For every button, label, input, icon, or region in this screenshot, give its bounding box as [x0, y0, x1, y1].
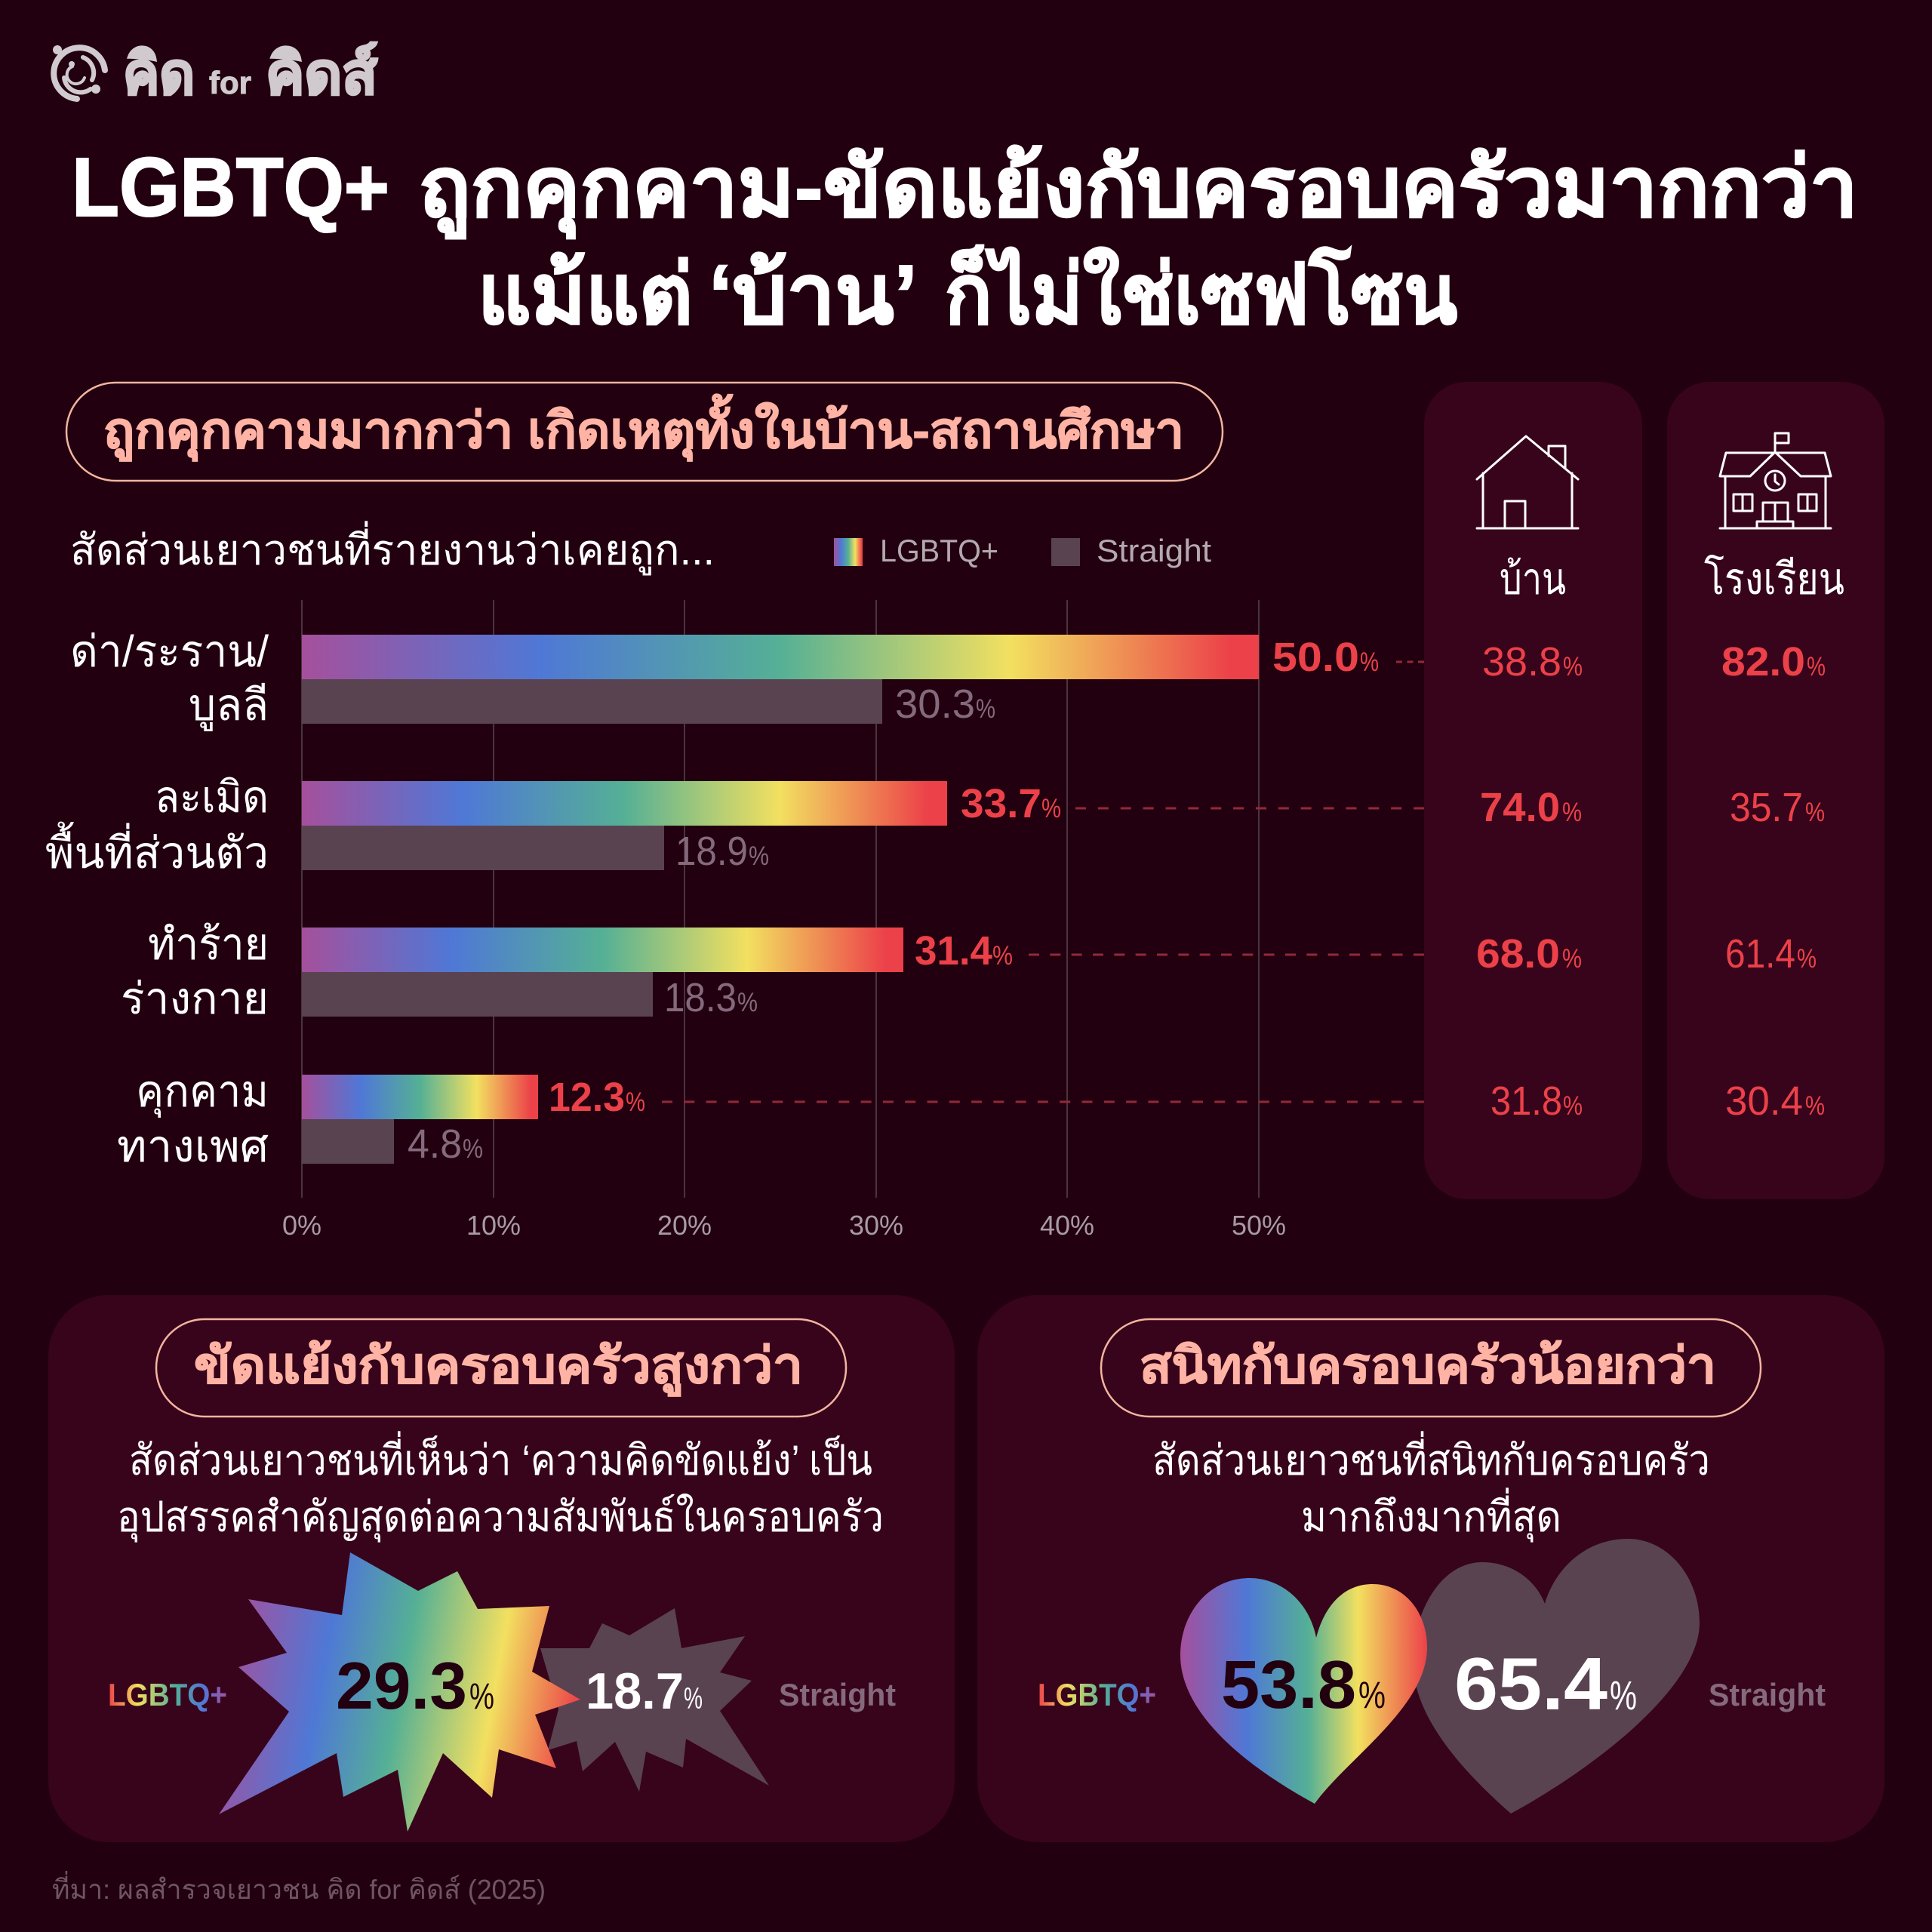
row: privacy: % — [749, 841, 769, 871]
heading pill: conflict: ขัดแย้งกับครอบครัวสูงกว่า — [194, 1337, 803, 1397]
row: bully: 30.3 — [895, 681, 975, 727]
home values: % — [1562, 798, 1582, 827]
row: sexual: % — [463, 1134, 483, 1164]
title: LGBTQ+ — [72, 141, 389, 234]
axis ticks: 30% — [849, 1210, 903, 1241]
chart subtitle: สัดส่วนเยาวชนที่รายงานว่าเคยถูก... — [70, 521, 715, 576]
value: 18.7: 18.7 — [586, 1663, 684, 1720]
row: privacy: ละเมิด — [155, 773, 269, 822]
legend: LGBTQ+ — [880, 533, 998, 568]
school values — [1721, 639, 1826, 1124]
source note: ที่มา: ผลสำรวจเยาวชน คิด for คิดส์ (2025) — [52, 1871, 546, 1905]
value: 53.8: % — [1358, 1674, 1386, 1716]
Straight label: Straight — [779, 1677, 896, 1712]
value: 65.4: 65.4 — [1454, 1642, 1607, 1725]
row: sexual: 4.8 — [408, 1121, 462, 1167]
row: physical: 31.4 — [915, 928, 992, 974]
value: 18.7: % — [684, 1682, 703, 1715]
row: physical: ร่างกาย — [121, 974, 269, 1023]
row: sexual: ทางเพศ — [117, 1122, 269, 1171]
school values: % — [1797, 944, 1817, 974]
school values: % — [1805, 1091, 1825, 1121]
icon: house — [1477, 436, 1578, 528]
Straight label: Straight — [1709, 1677, 1826, 1712]
row: privacy: 18.9 — [675, 829, 748, 874]
axis ticks: 0% — [282, 1210, 321, 1241]
row: bully: ด่า/ระราน/ — [70, 627, 269, 676]
row: sexual: % — [626, 1088, 645, 1117]
heading pill: close — [1101, 1319, 1761, 1417]
icon: school — [1720, 433, 1831, 528]
close description: มากถึงมากที่สุด — [1301, 1487, 1561, 1543]
panel: conflict — [48, 1295, 955, 1842]
logo wordmark — [123, 42, 378, 106]
LGBTQ+ label: LGBTQ+ — [108, 1677, 227, 1712]
home values — [1476, 639, 1583, 1124]
school values: % — [1805, 798, 1825, 827]
burst: straight — [540, 1608, 769, 1792]
row: sexual: 12.3 — [549, 1075, 625, 1120]
heart: LGBTQ+ — [1180, 1578, 1427, 1804]
row: bully: % — [1360, 648, 1379, 677]
heart: straight — [1413, 1539, 1700, 1814]
panel: home column — [1424, 382, 1642, 1199]
title — [72, 141, 1858, 341]
row: bully: บูลลี — [189, 681, 269, 731]
home values: 74.0 — [1480, 785, 1560, 830]
home values: % — [1563, 1091, 1583, 1121]
row: sexual: คุกคาม — [136, 1067, 269, 1118]
axis ticks: 10% — [466, 1210, 521, 1241]
burst: LGBTQ+ — [219, 1552, 580, 1832]
title: ‘บ้าน’ — [709, 248, 918, 341]
logo — [53, 42, 378, 106]
axis ticks: 40% — [1040, 1210, 1094, 1241]
value: 29.3: 29.3 — [336, 1648, 467, 1723]
home values: 68.0 — [1476, 931, 1560, 977]
dashed connectors — [662, 662, 1424, 1102]
close description: สัดส่วนเยาวชนที่สนิทกับครอบครัว — [1152, 1431, 1710, 1484]
row: privacy — [45, 773, 1061, 878]
close description — [1152, 1431, 1710, 1543]
school values: 30.4 — [1725, 1078, 1803, 1124]
row: bully: % — [976, 694, 995, 724]
conflict description — [117, 1431, 884, 1543]
title: ก็ไม่ใช่เซฟโซน — [945, 245, 1457, 341]
row: physical — [121, 920, 1013, 1023]
row: bully — [70, 627, 1379, 731]
logo wordmark: คิดส์ — [266, 42, 378, 106]
school values: 35.7 — [1730, 785, 1803, 830]
axis ticks — [282, 1210, 1286, 1241]
heading pill: threatened: ถูกคุกคามมากกว่า เกิดเหตุทั้งในบ้าน-สถานศึกษา — [103, 393, 1184, 462]
title: ถูกคุกคาม-ขัดแย้งกับครอบครัวมากกว่า — [419, 141, 1858, 239]
home label: บ้าน — [1500, 555, 1566, 604]
row: physical: 18.3 — [664, 975, 737, 1020]
axis ticks: 20% — [657, 1210, 712, 1241]
school values: 82.0 — [1721, 639, 1805, 685]
home values: 38.8 — [1482, 639, 1561, 685]
row: sexual — [117, 1067, 645, 1171]
row: physical: % — [737, 988, 758, 1017]
value: 53.8: 53.8 — [1221, 1647, 1356, 1723]
school values: % — [1807, 652, 1826, 681]
home values: % — [1562, 944, 1582, 974]
value: 29.3: % — [469, 1677, 494, 1717]
value: 65.4: % — [1610, 1673, 1637, 1718]
axis ticks: 50% — [1232, 1210, 1286, 1241]
logo wordmark: คิด — [123, 42, 195, 106]
row: privacy: % — [1041, 794, 1061, 823]
bar chart — [45, 600, 1424, 1241]
row: physical: ทำร้าย — [148, 920, 269, 969]
row: physical: % — [992, 941, 1013, 971]
icon: logo mark — [53, 45, 105, 99]
heading pill: conflict — [156, 1319, 846, 1417]
row: privacy: พื้นที่ส่วนตัว — [45, 822, 269, 878]
legend: Straight — [1097, 533, 1211, 568]
home values: 31.8 — [1491, 1078, 1562, 1124]
row: bully: 50.0 — [1272, 635, 1359, 680]
heading pill: close: สนิทกับครอบครัวน้อยกว่า — [1140, 1337, 1716, 1393]
school label: โรงเรียน — [1704, 554, 1844, 604]
logo wordmark: for — [209, 65, 251, 100]
conflict description: อุปสรรคสำคัญสุดต่อความสัมพันธ์ในครอบครัว — [117, 1493, 884, 1543]
LGBTQ+ label: LGBTQ+ — [1038, 1677, 1156, 1712]
conflict description: สัดส่วนเยาวชนที่เห็นว่า ‘ความคิดขัดแย้ง’ เป็น — [129, 1431, 872, 1484]
home values: % — [1563, 652, 1583, 681]
row: privacy: 33.7 — [961, 781, 1041, 826]
heading pill: threatened — [66, 383, 1223, 481]
legend — [834, 533, 1211, 568]
panel: close — [977, 1295, 1884, 1842]
title: แม้แต่ — [478, 248, 693, 341]
school values: 61.4 — [1725, 931, 1795, 977]
panel: school column — [1667, 382, 1884, 1199]
